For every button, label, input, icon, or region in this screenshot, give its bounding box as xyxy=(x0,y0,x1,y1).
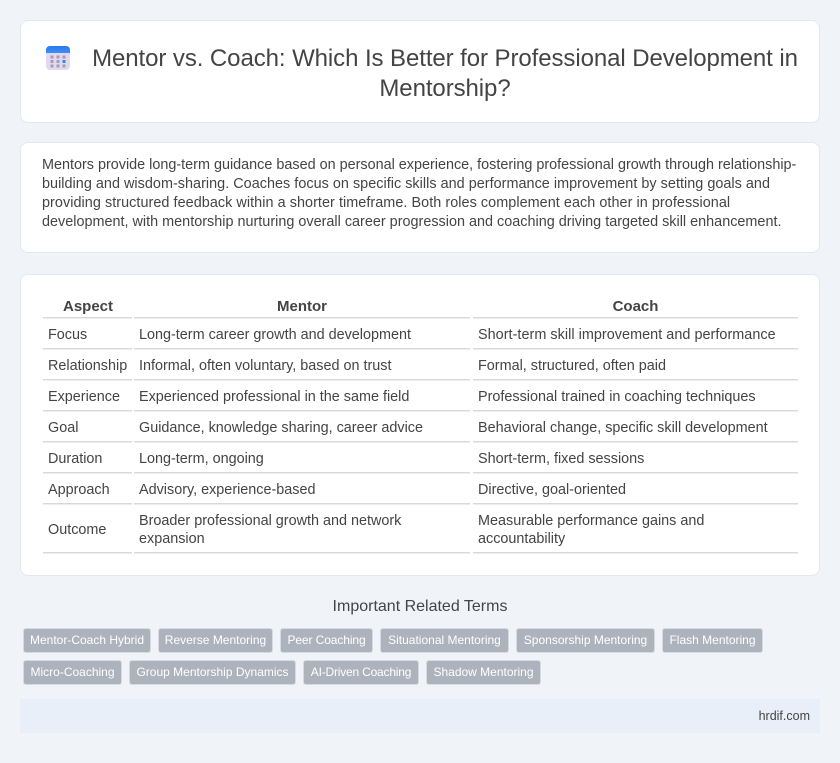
tag xyxy=(426,660,541,685)
tag: Peer Coaching xyxy=(287,633,366,647)
tag: Group Mentorship Dynamics xyxy=(136,665,289,679)
row: Goal: Behavioral change, specific skill development xyxy=(478,420,768,436)
row: Duration: Long-term, ongoing xyxy=(139,451,264,467)
row: Goal: Goal xyxy=(48,420,78,436)
panel: header xyxy=(20,20,820,123)
tag xyxy=(129,660,296,685)
row: Approach xyxy=(48,482,626,498)
row: Relationship: Relationship xyxy=(48,358,127,374)
row: Outcome: Measurable performance gains and xyxy=(478,513,704,529)
tag: Flash Mentoring xyxy=(669,633,756,647)
row: Experience: Professional trained in coaching techniques xyxy=(478,389,756,405)
tag xyxy=(158,628,273,653)
tag: Reverse Mentoring xyxy=(165,633,266,647)
tag: Mentor-Coach Hybrid xyxy=(30,633,144,647)
footer source: hrdif.com xyxy=(759,709,810,723)
tag xyxy=(662,628,763,653)
row: Outcome xyxy=(48,513,704,547)
intro paragraph: providing structured feedback within a shorter timeframe. Both roles complement each other in professional xyxy=(42,195,730,211)
tag: Micro-Coaching xyxy=(30,665,115,679)
tag: Shadow Mentoring xyxy=(433,665,534,679)
row: Duration xyxy=(48,451,644,467)
row: Outcome: accountability xyxy=(478,531,565,547)
panel: intro text xyxy=(20,142,820,253)
title xyxy=(92,45,798,102)
footer xyxy=(20,699,820,733)
row: Outcome: Broader professional growth and network xyxy=(139,513,401,529)
row: Outcome: Outcome xyxy=(48,522,106,538)
heading: related terms: Important Related Terms xyxy=(333,598,507,615)
tag: AI-Driven Coaching xyxy=(311,665,411,679)
row: Duration: Duration xyxy=(48,451,102,467)
intro paragraph xyxy=(42,157,796,230)
table header: Coach xyxy=(613,298,658,315)
row: Focus: Focus xyxy=(48,327,87,343)
row: Focus xyxy=(48,327,776,343)
row: Goal: Guidance, knowledge sharing, career advice xyxy=(139,420,423,436)
row: Outcome: expansion xyxy=(139,531,205,547)
tag xyxy=(303,660,419,685)
row: Approach: Approach xyxy=(48,482,110,498)
row: Experience xyxy=(48,389,756,405)
row: Experience: Experience xyxy=(48,389,120,405)
icon: calendar xyxy=(46,46,70,70)
tag xyxy=(23,628,151,653)
tag xyxy=(280,628,373,653)
tag xyxy=(23,660,122,685)
row: Relationship xyxy=(48,358,666,374)
tag: Sponsorship Mentoring xyxy=(524,633,647,647)
intro paragraph: building and wisdom-sharing. Coaches focus on specific skills and performance improvement by setting goals and xyxy=(42,176,770,192)
row: Experience: Experienced professional in the same field xyxy=(139,389,409,405)
row: Relationship: Informal, often voluntary, based on trust xyxy=(139,358,392,374)
row: Approach: Advisory, experience-based xyxy=(139,482,316,498)
table header xyxy=(63,298,658,315)
title: Mentor vs. Coach: Which Is Better for Professional Development in xyxy=(92,45,798,72)
row: Focus: Short-term skill improvement and performance xyxy=(478,327,776,343)
intro paragraph: development, with mentorship nurturing overall career progression and coaching driving targeted skill enhancement. xyxy=(42,214,781,230)
row: Duration: Short-term, fixed sessions xyxy=(478,451,644,467)
intro paragraph: Mentors provide long-term guidance based on personal experience, fostering professional growth through relationship- xyxy=(42,157,796,173)
table header: Aspect xyxy=(63,298,113,315)
tag xyxy=(380,628,509,653)
tag: Situational Mentoring xyxy=(388,633,501,647)
title: Mentorship? xyxy=(379,75,511,102)
row: Focus: Long-term career growth and development xyxy=(139,327,411,343)
tag xyxy=(516,628,655,653)
row: Approach: Directive, goal-oriented xyxy=(478,482,626,498)
panel: comparison table xyxy=(20,274,820,576)
table header: Mentor xyxy=(277,298,327,315)
row: Relationship: Formal, structured, often paid xyxy=(478,358,666,374)
row: Goal xyxy=(48,420,768,436)
tag list: related terms xyxy=(23,628,763,685)
